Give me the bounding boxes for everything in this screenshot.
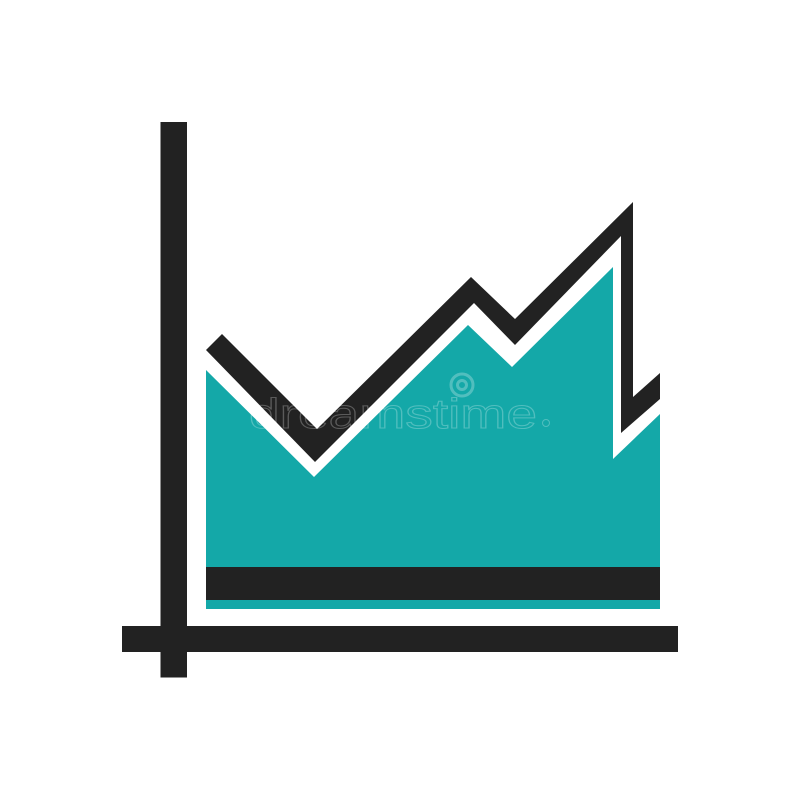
watermark (249, 374, 550, 437)
dark trend line (206, 202, 660, 462)
x axis (122, 626, 678, 652)
watermark registered mark (542, 420, 550, 426)
watermark spiral icon (451, 374, 473, 396)
teal area chart (206, 267, 660, 609)
watermark wordmark: dreamstime (249, 390, 537, 437)
y axis (160, 122, 187, 678)
dark baseline band (206, 567, 660, 600)
